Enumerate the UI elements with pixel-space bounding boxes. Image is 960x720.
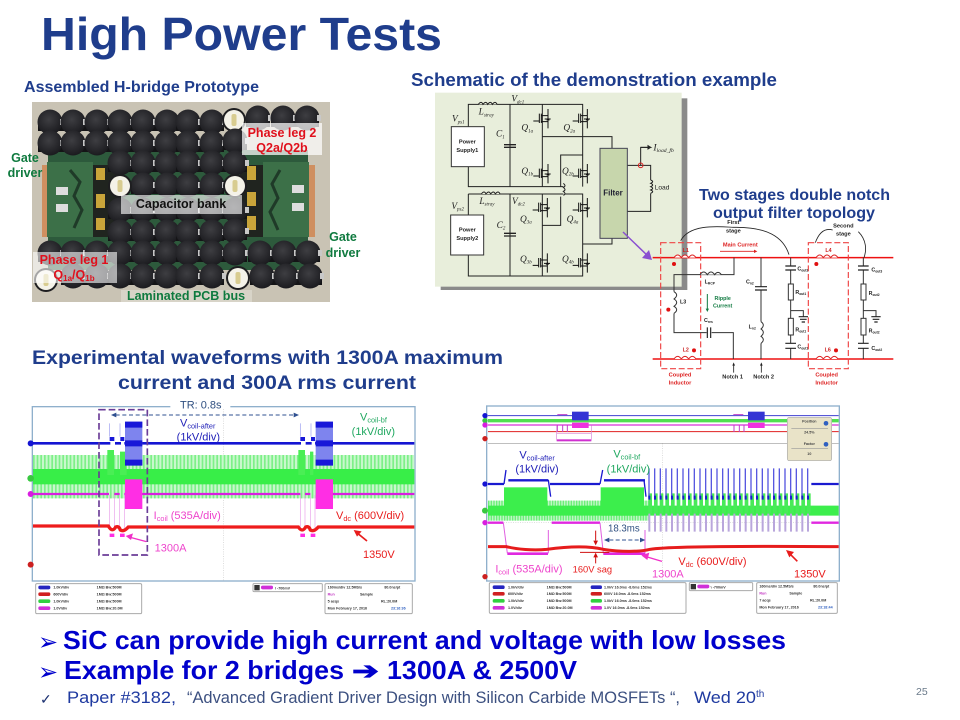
annotation labels: V (678, 556, 686, 568)
component labels: out3 (801, 269, 808, 273)
component labels: V (511, 95, 517, 105)
left gate driver board (42, 162, 120, 237)
coupled inductor outlines (661, 243, 848, 369)
bullet: SiC statement: ➢ (38, 629, 58, 656)
scope timebase box (325, 584, 412, 614)
stage labels: Second (833, 223, 854, 229)
zoom overview strip (488, 412, 839, 443)
green trace Vcoil-bf (488, 487, 839, 516)
component labels: res (708, 320, 713, 324)
stage brackets (681, 227, 866, 258)
scope timebase box: 23:16:36 (391, 606, 406, 610)
scope timebase box: RL:20.0M (810, 598, 826, 602)
component labels: V (452, 115, 458, 125)
scope legend left: 1.0kV/div (508, 599, 525, 603)
scope legend left: 1MΩ Bw:500M (547, 585, 572, 589)
stage labels: stage (836, 231, 851, 237)
label: phase leg 1: /Q (72, 268, 86, 282)
component labels: 2a (570, 129, 576, 134)
arrow head (642, 250, 652, 260)
annotation labels: 1350V (794, 568, 826, 580)
right gate driver board (240, 162, 315, 237)
annotation labels: 1300A (652, 568, 684, 580)
channel markers (27, 440, 34, 568)
annotation labels (495, 448, 826, 580)
component labels: 1a (528, 129, 534, 134)
green trace Vcoil-bf (33, 450, 414, 484)
component labels: L1 (683, 248, 689, 254)
power supply 2: Power (459, 227, 477, 233)
component labels: L4 (825, 248, 832, 254)
TR period arrow (111, 398, 299, 417)
component labels: out2 (873, 293, 880, 297)
label: phase leg 2 (242, 123, 322, 155)
scope timebase box: 160ms/div 12.5MS/s (328, 586, 362, 590)
annotation labels: I (154, 510, 157, 522)
bullet: example for 2 bridges (38, 655, 578, 686)
scope trigger box: \ -700mV (711, 585, 726, 589)
scope legend left: 600V 16.0ms -8.0ms 152ms (604, 592, 651, 596)
heading: experimental waveforms: current and 300A rms current (118, 372, 417, 394)
power supply 1: Supply1 (456, 148, 478, 154)
capacitor bank (34, 106, 324, 292)
scope timebase box: 160ms/div 12.5MS/s (759, 585, 794, 589)
annotation labels: 18.3ms (608, 524, 640, 535)
label: phase leg 1: 1b (85, 274, 95, 283)
component labels: ps1 (457, 120, 465, 125)
annotation labels: (1kV/div) (607, 464, 650, 476)
bullet: paper reference: th (756, 689, 764, 700)
bullet: paper reference: Paper #3182, (67, 689, 176, 707)
label: gate driver right (326, 230, 361, 260)
load current probe: load_fb (657, 147, 674, 154)
scope legend left: 1.0kV/div (53, 586, 70, 590)
component labels: L (705, 279, 708, 285)
component labels: out2 (875, 348, 882, 352)
scope timebase box: 23:18:44 (818, 605, 834, 609)
component labels: 1 (502, 135, 505, 140)
component labels: out1 (799, 330, 806, 334)
scope legend left: 1.0kV/div (53, 599, 70, 603)
component labels: 4b (569, 261, 574, 266)
heading: output filter topology: output filter topology (713, 205, 875, 222)
heading: assembled prototype: Assembled H-bridge Prototype (24, 79, 259, 96)
component labels: 4a (573, 221, 579, 226)
channel markers (482, 413, 488, 579)
stage labels: First (727, 220, 740, 226)
component labels: Q (562, 255, 569, 265)
label: phase leg 2: Q2a/Q2b (256, 141, 308, 155)
component labels: C (496, 130, 502, 140)
stage labels (726, 220, 854, 237)
bullet: paper reference: ✓ (40, 691, 52, 707)
scope trigger box (253, 584, 322, 592)
annotation labels: V (180, 418, 187, 430)
component labels: R (869, 291, 873, 297)
circuit wiring (468, 104, 651, 276)
panel: schematic of demonstration example (435, 93, 687, 290)
scope legend left: 1MΩ Bw:500M (547, 599, 572, 603)
circuit: two-stage double notch filter (640, 220, 907, 386)
annotation labels: V (360, 412, 367, 424)
component labels: out1 (801, 346, 808, 350)
scope legend left: 1.0kV/div (508, 585, 525, 589)
component labels: dc2 (518, 203, 525, 208)
blue trace Vcoil-after (33, 422, 414, 465)
component labels: Q (521, 167, 528, 177)
component labels (680, 248, 882, 353)
heading: schematic: Schematic of the demonstration example (411, 70, 777, 90)
label: gate driver left: Gate (11, 151, 39, 165)
scope legend left: 1.0V/div (53, 606, 68, 610)
scope timebase box: Mon February 17, 2016 (328, 606, 367, 610)
label: phase leg 2: Phase leg 2 (248, 126, 316, 140)
annotation labels: (535A/div) (168, 510, 221, 522)
red trace Vdc (33, 526, 414, 531)
component labels: L (749, 324, 752, 330)
ripple current label: Current (713, 304, 733, 310)
component labels: 1b (528, 173, 534, 178)
coupled inductor captions (669, 373, 839, 386)
notch branch wiring (674, 258, 876, 359)
scope timebase box: RL:20.0M (381, 599, 397, 603)
title: High Power Tests (41, 8, 442, 60)
photo: H-bridge prototype (32, 102, 330, 303)
stage labels: stage (726, 228, 741, 234)
coupled inductor captions: Coupled (669, 373, 692, 379)
position and factor box: Factor (804, 442, 815, 446)
coupled inductor captions: Coupled (815, 373, 839, 379)
scope legend left: 1MΩ Bw:20.0M (97, 606, 123, 610)
scope timebase box: 80.0ns/pt (813, 585, 830, 589)
component labels: R (795, 290, 799, 296)
component labels: V (512, 197, 518, 207)
heading: output filter topology: Two stages double notch (699, 187, 890, 204)
main current label: Main Current (723, 243, 758, 249)
annotation labels: coil (498, 567, 510, 576)
component labels: n2 (750, 281, 754, 285)
coupled inductor captions: Inductor (669, 380, 692, 386)
component labels: C (797, 344, 801, 350)
scope legend left: 1MΩ Bw:20.0M (547, 606, 573, 610)
component labels: dc1 (517, 100, 524, 105)
load current probe: Load (655, 184, 670, 191)
label: phase leg 1: 1a (63, 274, 73, 283)
TR period arrow: TR: 0.8s (180, 399, 222, 411)
heading: experimental waveforms (32, 347, 503, 394)
chart: oscilloscope waveform 2 (482, 406, 839, 613)
component labels: stray (485, 203, 495, 208)
scope timebase box: 5 acqs (328, 599, 339, 603)
component labels: Q (520, 255, 527, 265)
bullet: example for 2 bridges: ➢ (38, 659, 58, 686)
component labels: out3 (875, 270, 882, 274)
component labels: C (797, 267, 801, 273)
main current label (720, 243, 758, 253)
bullet: paper reference: Wed 20 (694, 689, 756, 707)
filter block (600, 148, 627, 238)
heading: experimental waveforms: Experimental waveforms with 1300A maximum (32, 347, 503, 369)
annotation labels: V (519, 449, 527, 461)
annotation labels: (1kV/div) (177, 432, 220, 444)
position and factor box: 24.5% (804, 430, 815, 434)
component labels: Q (562, 167, 569, 177)
position and factor box: 10 (807, 452, 811, 456)
scope legend left: 1MΩ Bw:500M (97, 599, 122, 603)
annotation labels: coil-bf (367, 416, 388, 425)
annotation labels: (535A/div) (509, 563, 563, 575)
scope legend left: 1.0V/div (508, 606, 523, 610)
annotation labels: (600V/div) (351, 510, 404, 522)
label: gate driver left (8, 151, 43, 180)
power supply 2 (451, 215, 484, 255)
scope legend left (489, 583, 686, 613)
annotation labels: coil-after (527, 453, 555, 462)
position and factor box: Position (802, 420, 817, 424)
polarity dots (666, 262, 838, 352)
ripple current label (706, 294, 733, 312)
heading: output filter topology (699, 187, 890, 222)
label: laminated PCB bus: Laminated PCB bus (127, 289, 245, 303)
annotation labels: (600V/div) (693, 556, 747, 568)
component labels: C (704, 318, 708, 324)
component labels: Q (563, 124, 570, 134)
scope timebase box: Run (328, 592, 335, 596)
scope legend left: 600V/div (53, 592, 69, 596)
magenta trace Icoil (488, 523, 839, 554)
arrow: filter to topology (623, 232, 650, 258)
component labels: C (746, 279, 750, 285)
component labels: RCP (708, 281, 716, 285)
notch markers: Notch 2 (753, 375, 774, 381)
component labels: V (451, 202, 457, 212)
component labels: Q (567, 215, 573, 225)
scope timebase box: Sample (360, 592, 373, 596)
label: gate driver right: driver (326, 246, 361, 260)
component labels: 2 (503, 227, 506, 232)
annotation labels: (1kV/div) (352, 426, 395, 438)
dashed selection box (99, 410, 147, 555)
scope legend left: 1.0kV 16.0ms -8.0ms 152ms (604, 585, 652, 589)
component labels: 2b (569, 173, 574, 178)
annotation labels: dc (343, 514, 351, 523)
blue trace Vcoil-after (488, 470, 839, 498)
annotation labels: I (495, 563, 498, 575)
notch markers: Notch 1 (722, 375, 743, 381)
scope legend left: 1.0kV 16.0ms -8.0ms 152ms (604, 599, 652, 603)
scope legend left: 1MΩ Bw:500M (97, 592, 122, 596)
annotation labels: coil (157, 514, 168, 523)
scope timebase box: Sample (789, 591, 802, 595)
filter block: Filter (603, 188, 623, 197)
label: phase leg 1: Phase leg 1 (40, 253, 108, 267)
component labels: 3b (527, 261, 532, 266)
annotation labels: coil-after (187, 422, 216, 431)
component labels: C (871, 268, 875, 274)
component labels: Q (521, 124, 528, 134)
component labels: n2 (752, 326, 756, 330)
bullet: paper reference (40, 689, 764, 707)
scope legend left (36, 584, 142, 614)
scope timebase box (757, 583, 837, 613)
component labels (451, 95, 579, 266)
component labels: 3a (527, 221, 532, 226)
bullet: paper reference: “Advanced Gradient Driver Design with Silicon Carbide MOSFETs “, (187, 689, 680, 707)
bullet: example for 2 bridges: ➔ (352, 658, 379, 685)
component labels: L6 (825, 347, 831, 353)
label: capacitor bank (121, 195, 242, 214)
scope timebase box: 7 acqs (759, 598, 771, 602)
component labels: L (479, 197, 485, 207)
component labels: out2 (873, 331, 880, 335)
component labels: L3 (680, 299, 686, 305)
component labels: L (479, 108, 484, 118)
load current probe (638, 142, 674, 191)
annotation labels: (1kV/div) (515, 464, 559, 476)
measurement arrows (580, 531, 797, 563)
annotation labels: V (336, 510, 343, 522)
MOSFETs (533, 109, 590, 273)
scope timebase box: 80.0ns/pt (384, 586, 401, 590)
label: gate driver right: Gate (329, 230, 357, 244)
annotation labels: coil-bf (621, 452, 641, 461)
pointer arrows (126, 530, 367, 542)
scope timebase box: Mon February 17, 2016 (759, 605, 799, 609)
power supply 2: Supply2 (456, 236, 478, 242)
annotation labels: 1300A (155, 543, 187, 555)
scope timebase box: Run (759, 591, 766, 595)
page number: 25 (916, 686, 928, 698)
chart: oscilloscope waveform 1 (27, 398, 415, 614)
component labels: stray (484, 113, 495, 118)
red bus lines (653, 258, 893, 359)
component labels: C (871, 346, 875, 352)
annotation labels: dc (686, 560, 694, 569)
annotation labels (154, 412, 404, 561)
ripple current label: Ripple (715, 296, 731, 302)
component labels: C (497, 221, 503, 231)
component labels: ps2 (456, 208, 464, 213)
bullet: SiC statement: SiC can provide high current and voltage with low losses (63, 625, 786, 655)
bullet: example for 2 bridges: Example for 2 bridges (64, 655, 344, 685)
position and factor box (787, 417, 832, 461)
scope legend left: 600V/div (508, 592, 524, 596)
scope trigger box: \ -700mV (275, 586, 291, 590)
bullet: example for 2 bridges: 1300A & 2500V (387, 655, 578, 685)
label: gate driver left: driver (8, 166, 43, 180)
annotation labels: V (613, 448, 621, 460)
inductors on rails (674, 255, 838, 359)
scope trigger box (689, 583, 753, 591)
notch markers (722, 362, 774, 381)
magenta trace Icoil (33, 479, 414, 535)
scope legend left: 1.0V 16.0ms -8.0ms 152ms (604, 606, 650, 610)
component labels: Q (520, 215, 527, 225)
component labels: L2 (683, 347, 689, 353)
power supply 1 (451, 127, 484, 167)
scope legend left: 1MΩ Bw:500M (97, 586, 122, 590)
label: phase leg 1: Q (53, 268, 63, 282)
coupled inductor captions: Inductor (815, 380, 839, 386)
load current probe: I (653, 142, 657, 153)
scope legend left: 1MΩ Bw:500M (547, 592, 572, 596)
component labels: R (795, 328, 799, 334)
power supply 1: Power (459, 139, 477, 145)
label: capacitor bank: Capacitor bank (136, 197, 226, 211)
annotation labels: 1350V (363, 549, 395, 561)
component labels: out1 (799, 292, 806, 296)
red trace Vdc (488, 546, 839, 551)
label: phase leg 1 (33, 252, 117, 283)
component labels: R (869, 329, 873, 335)
annotation labels: 160V sag (573, 565, 612, 575)
